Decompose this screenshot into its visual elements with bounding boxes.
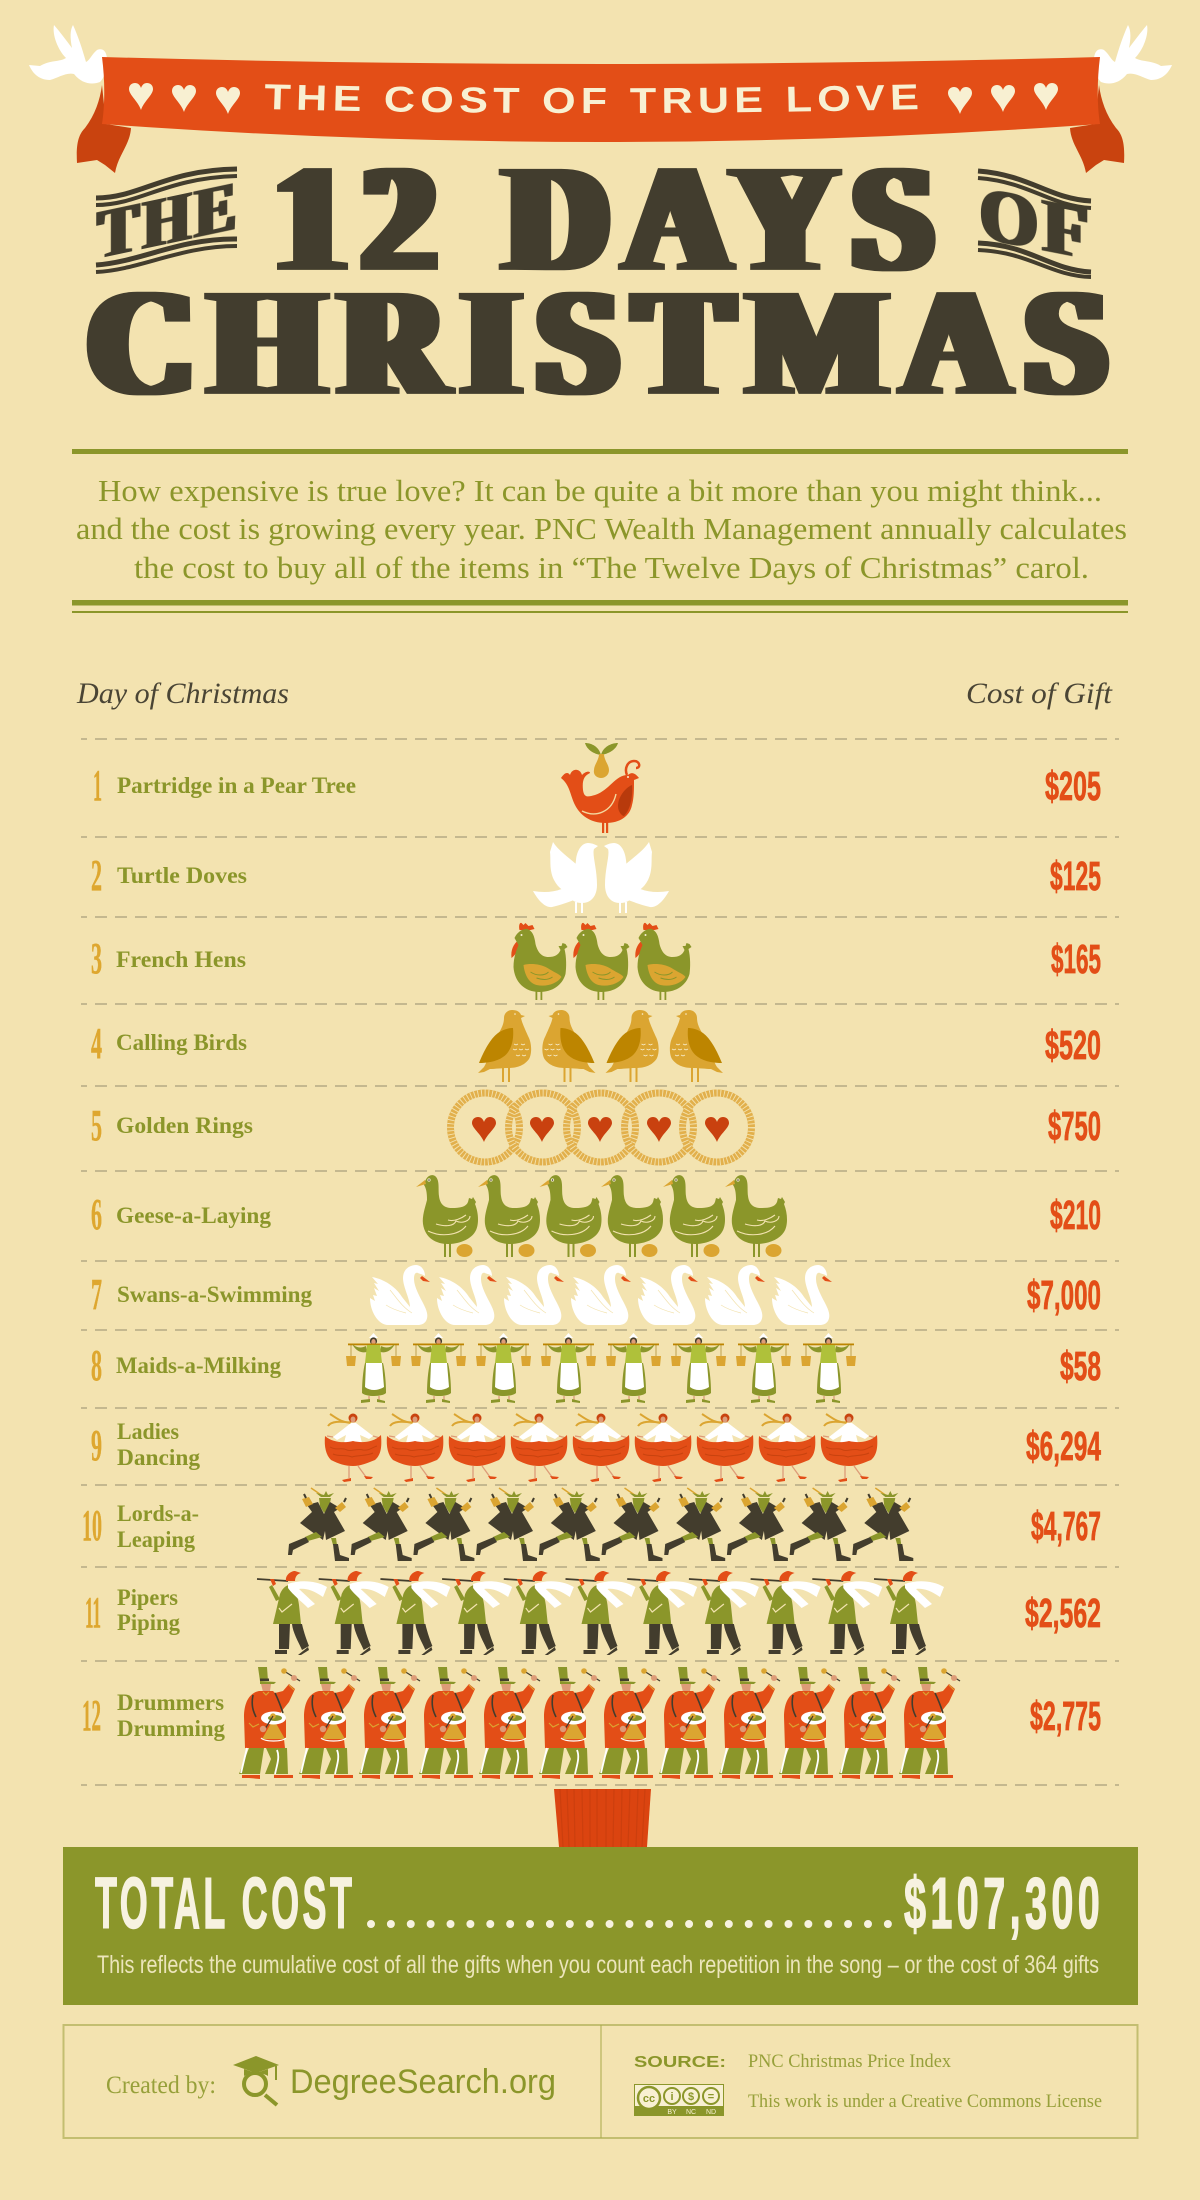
license note: This work is under a Creative Commons License <box>748 2091 1102 2112</box>
total label: TOTAL COST <box>95 1863 352 1944</box>
cost: $2,775 <box>1030 1693 1101 1739</box>
gift name <box>117 1501 199 1552</box>
intro text <box>76 473 1127 585</box>
gift name: Turtle Doves <box>117 863 247 888</box>
gift name: Calling Birds <box>116 1030 247 1055</box>
day number: 2 <box>91 851 102 900</box>
cost: $210 <box>1050 1192 1101 1238</box>
title word: THE with wavy bands: THE <box>98 167 240 274</box>
icon: creative commons badge: BY <box>667 2109 677 2116</box>
row 3: french hens <box>91 923 1101 1000</box>
panel: credits footer <box>64 2025 1138 2138</box>
gift name <box>117 1690 225 1741</box>
ribbon left tail <box>77 85 131 173</box>
column heading: day: Day of Christmas <box>76 677 289 710</box>
title line: 12 DAYS: 12 DAYS <box>275 134 950 304</box>
ribbon hearts left <box>129 83 240 114</box>
row 5: golden rings <box>91 1093 1101 1162</box>
row 10: lords <box>82 1488 1101 1561</box>
icon: graduation cap magnifier logo <box>233 2056 279 2105</box>
icon: twelve drummers <box>239 1667 960 1779</box>
leader dots <box>371 1920 888 1928</box>
row 1: partridge <box>93 743 1101 833</box>
day number: 7 <box>91 1270 102 1319</box>
day number: 9 <box>91 1421 102 1470</box>
icon: four calling birds <box>478 1010 723 1082</box>
gift name: Partridge in a Pear Tree <box>117 773 356 798</box>
ribbon right tail <box>1070 85 1124 173</box>
row 2: turtle doves <box>91 842 1101 913</box>
row 6: geese <box>91 1175 1101 1257</box>
icon: creative commons badge: i <box>670 2091 674 2103</box>
gift name: Ladies <box>117 1419 179 1444</box>
gift name: Maids-a-Milking <box>116 1353 281 1378</box>
intro text: How expensive is true love? It can be quite a bit more than you might think... <box>98 473 1102 508</box>
row 7: swans <box>91 1265 1101 1325</box>
panel: total cost <box>63 1847 1138 2005</box>
cost: $750 <box>1048 1103 1101 1149</box>
source name: PNC Christmas Price Index <box>748 2051 951 2072</box>
day number: 8 <box>91 1341 102 1390</box>
title: The 12 Days of Christmas <box>89 134 1124 428</box>
ribbon body <box>102 57 1100 142</box>
day number: 6 <box>91 1190 102 1239</box>
row 11: pipers <box>85 1571 1101 1655</box>
brand name: DegreeSearch.org <box>290 2063 556 2101</box>
icon: right dove <box>1094 25 1172 83</box>
icon: creative commons badge <box>634 2084 724 2116</box>
row 4: calling birds <box>91 1010 1101 1082</box>
cost: $165 <box>1051 936 1101 982</box>
banner ribbon with doves <box>29 25 1172 214</box>
icon: left dove <box>29 25 107 83</box>
gift name: Piping <box>117 1610 180 1635</box>
gift name: Drummers <box>117 1690 224 1715</box>
day number: 5 <box>91 1101 102 1150</box>
intro text: and the cost is growing every year. PNC Wealth Management annually calculates <box>76 511 1127 546</box>
icon: three french hens <box>511 923 692 1000</box>
day number: 3 <box>91 934 102 983</box>
icon: creative commons badge: ND <box>706 2109 716 2116</box>
gift name: Pipers <box>117 1585 178 1610</box>
icon: five golden rings with hearts <box>450 1093 752 1162</box>
icon: seven swans <box>370 1265 832 1325</box>
cost: $205 <box>1045 763 1101 809</box>
cost: $520 <box>1045 1022 1101 1068</box>
icon: ten leaping lords <box>288 1488 913 1561</box>
total amount: $107,300 <box>904 1864 1100 1944</box>
source label: SOURCE: <box>634 2054 726 2071</box>
gift name: Leaping <box>117 1527 195 1552</box>
row 11: pipers: 11 <box>85 1588 101 1637</box>
icon: eight maids with buckets <box>346 1333 856 1403</box>
gift name: Geese-a-Laying <box>116 1203 272 1228</box>
gift name: Dancing <box>117 1445 201 1470</box>
cost: $58 <box>1060 1343 1101 1389</box>
day number: 4 <box>91 1019 102 1068</box>
cost: $4,767 <box>1031 1503 1101 1549</box>
gift name: French Hens <box>116 947 246 972</box>
row 9: ladies <box>91 1414 1101 1482</box>
icon: six geese with eggs <box>416 1175 787 1257</box>
gift name: Swans-a-Swimming <box>117 1282 312 1307</box>
cost: $2,562 <box>1025 1590 1101 1636</box>
intro text: the cost to buy all of the items in “The Twelve Days of Christmas” carol. <box>134 550 1089 585</box>
title line: CHRISTMAS: CHRISTMAS <box>89 258 1124 428</box>
tree trunk pot <box>554 1789 651 1847</box>
icon: two turtle doves <box>533 842 669 913</box>
cost: $6,294 <box>1026 1423 1101 1469</box>
cost: $125 <box>1050 853 1101 899</box>
title word: OF with wavy bands: OF <box>980 171 1093 277</box>
icon: creative commons badge: = <box>708 2091 714 2103</box>
icon: nine dancing ladies <box>325 1414 877 1482</box>
icon: creative commons badge: $ <box>688 2091 694 2103</box>
cost: $7,000 <box>1027 1272 1101 1318</box>
column heading: cost: Cost of Gift <box>966 677 1113 710</box>
icon: creative commons badge: cc <box>643 2093 655 2105</box>
icon: eleven pipers <box>257 1571 944 1655</box>
row 8: maids <box>91 1333 1101 1403</box>
gift name: Lords-a- <box>117 1501 199 1526</box>
row 12: drummers <box>82 1667 1101 1779</box>
created by label: Created by: <box>106 2072 216 2099</box>
gift name <box>117 1585 180 1635</box>
ribbon heading: THE COST OF TRUE LOVE <box>265 84 918 114</box>
row 12: drummers: 12 <box>82 1691 101 1740</box>
row 1: partridge: 1 <box>93 761 102 810</box>
gift name <box>117 1419 201 1470</box>
gift name: Golden Rings <box>116 1113 253 1138</box>
gift name: Drumming <box>117 1716 225 1741</box>
icon: creative commons badge: NC <box>686 2109 696 2116</box>
row 10: lords: 10 <box>82 1501 102 1550</box>
ribbon hearts right <box>948 83 1058 114</box>
icon: partridge with pear and leaves <box>561 743 639 833</box>
